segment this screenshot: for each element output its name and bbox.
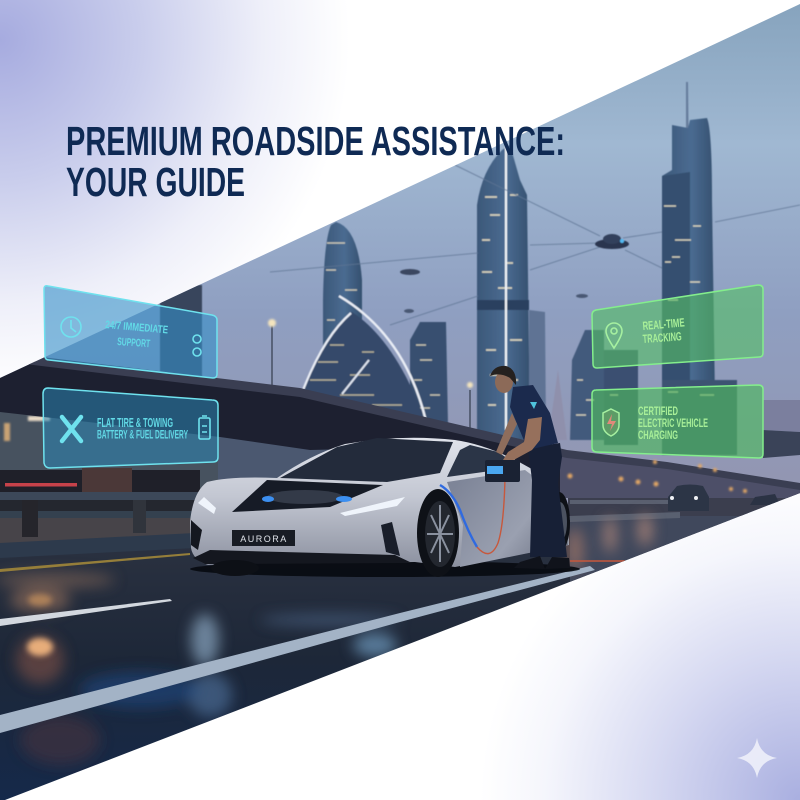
drone: small left: [400, 269, 420, 275]
drones: [400, 234, 629, 313]
title: [66, 118, 565, 205]
engine cover: [262, 490, 352, 504]
text: immediate support: SUPPORT: [117, 336, 151, 350]
panel: flat tire, towing, battery and fuel: [43, 388, 218, 468]
handheld charger: [485, 460, 520, 482]
tower: centre skyscraper: [477, 145, 546, 440]
engine bay: [232, 480, 383, 512]
arm left: [496, 413, 517, 455]
lane markings: [0, 553, 595, 733]
icon: location pin: [606, 323, 622, 348]
building: arched opera structure: [300, 296, 426, 421]
tower: far left block: [160, 285, 202, 385]
title: YOUR GUIDE: [66, 159, 245, 205]
misty city under the bridge: [0, 412, 330, 492]
text: tracking: REAL-TIME: [642, 315, 685, 333]
icon: shield: [603, 409, 619, 436]
wheel: front left: [211, 560, 259, 576]
elevated bridge: [0, 352, 800, 498]
drone: small right: [576, 294, 588, 298]
text: tracking: [642, 315, 685, 346]
icon: sparkle mark: [737, 738, 777, 778]
headlight left: [198, 497, 216, 514]
legs: [528, 443, 567, 557]
cables: [270, 165, 800, 325]
guard rail left: [0, 492, 200, 558]
text: EV charging: CERTIFIED: [638, 404, 678, 418]
wheel: rear: [548, 492, 570, 552]
torso: [510, 385, 558, 450]
licence plate: [232, 530, 295, 546]
panel: certified EV charging: [592, 385, 763, 458]
panel: 24/7 immediate support: [44, 286, 217, 378]
panel: real-time tracking: [592, 285, 763, 368]
technician: [490, 366, 570, 569]
icon: clock: [61, 317, 81, 337]
drone: small low: [404, 309, 414, 313]
street lamps: [271, 326, 471, 428]
distant car far: [750, 494, 780, 505]
lower intake: [193, 550, 412, 564]
building: low right of arch: [410, 322, 448, 425]
road: [0, 520, 800, 800]
orange cable: [477, 477, 625, 561]
right roadway far section: [570, 512, 750, 582]
tower: right skyscraper with spire: [662, 82, 715, 400]
lamp glow: [268, 319, 473, 388]
side vent: [381, 522, 400, 556]
car: [190, 438, 580, 577]
blue charging cable: [440, 485, 477, 547]
bridge lights right: [568, 460, 747, 493]
text: services: FLAT TIRE & TOWING: [97, 416, 173, 430]
drone: large: [595, 234, 629, 249]
text: EV charging: [638, 404, 708, 442]
side window: [447, 445, 505, 477]
text: EV charging: ELECTRIC VEHICLE: [638, 416, 708, 430]
guard rail right: [568, 498, 800, 522]
windshield: [280, 438, 453, 482]
buildings: right distant cluster: [548, 330, 737, 455]
icon: crossed tools: [62, 417, 81, 441]
wheel: front: [417, 489, 459, 577]
text: services: BATTERY & FUEL DELIVERY: [97, 430, 188, 442]
arm right: [503, 417, 542, 462]
text: EV charging: CHARGING: [638, 428, 678, 442]
icon: battery: [199, 416, 210, 439]
skyline: [160, 82, 800, 455]
headlight right: [340, 497, 405, 516]
shoes: [514, 556, 570, 569]
sky: [0, 0, 800, 520]
head: [490, 366, 516, 393]
licence plate: AURORA: [240, 534, 288, 544]
car shadow: [190, 561, 580, 577]
text: tracking: TRACKING: [642, 329, 682, 346]
distant car: [668, 484, 709, 511]
tower: left glass tower: [322, 222, 362, 346]
text: services: [97, 416, 188, 442]
road reflections: [0, 514, 652, 765]
shoulder badge: [530, 402, 537, 409]
icon: headset: [193, 335, 201, 356]
nose vent left: [191, 520, 202, 550]
door panel: [447, 470, 568, 567]
title: PREMIUM ROADSIDE ASSISTANCE:: [66, 118, 565, 164]
text: immediate support: [105, 319, 169, 350]
car body: [190, 438, 569, 567]
text: immediate support: 24/7 IMMEDIATE: [105, 319, 169, 336]
